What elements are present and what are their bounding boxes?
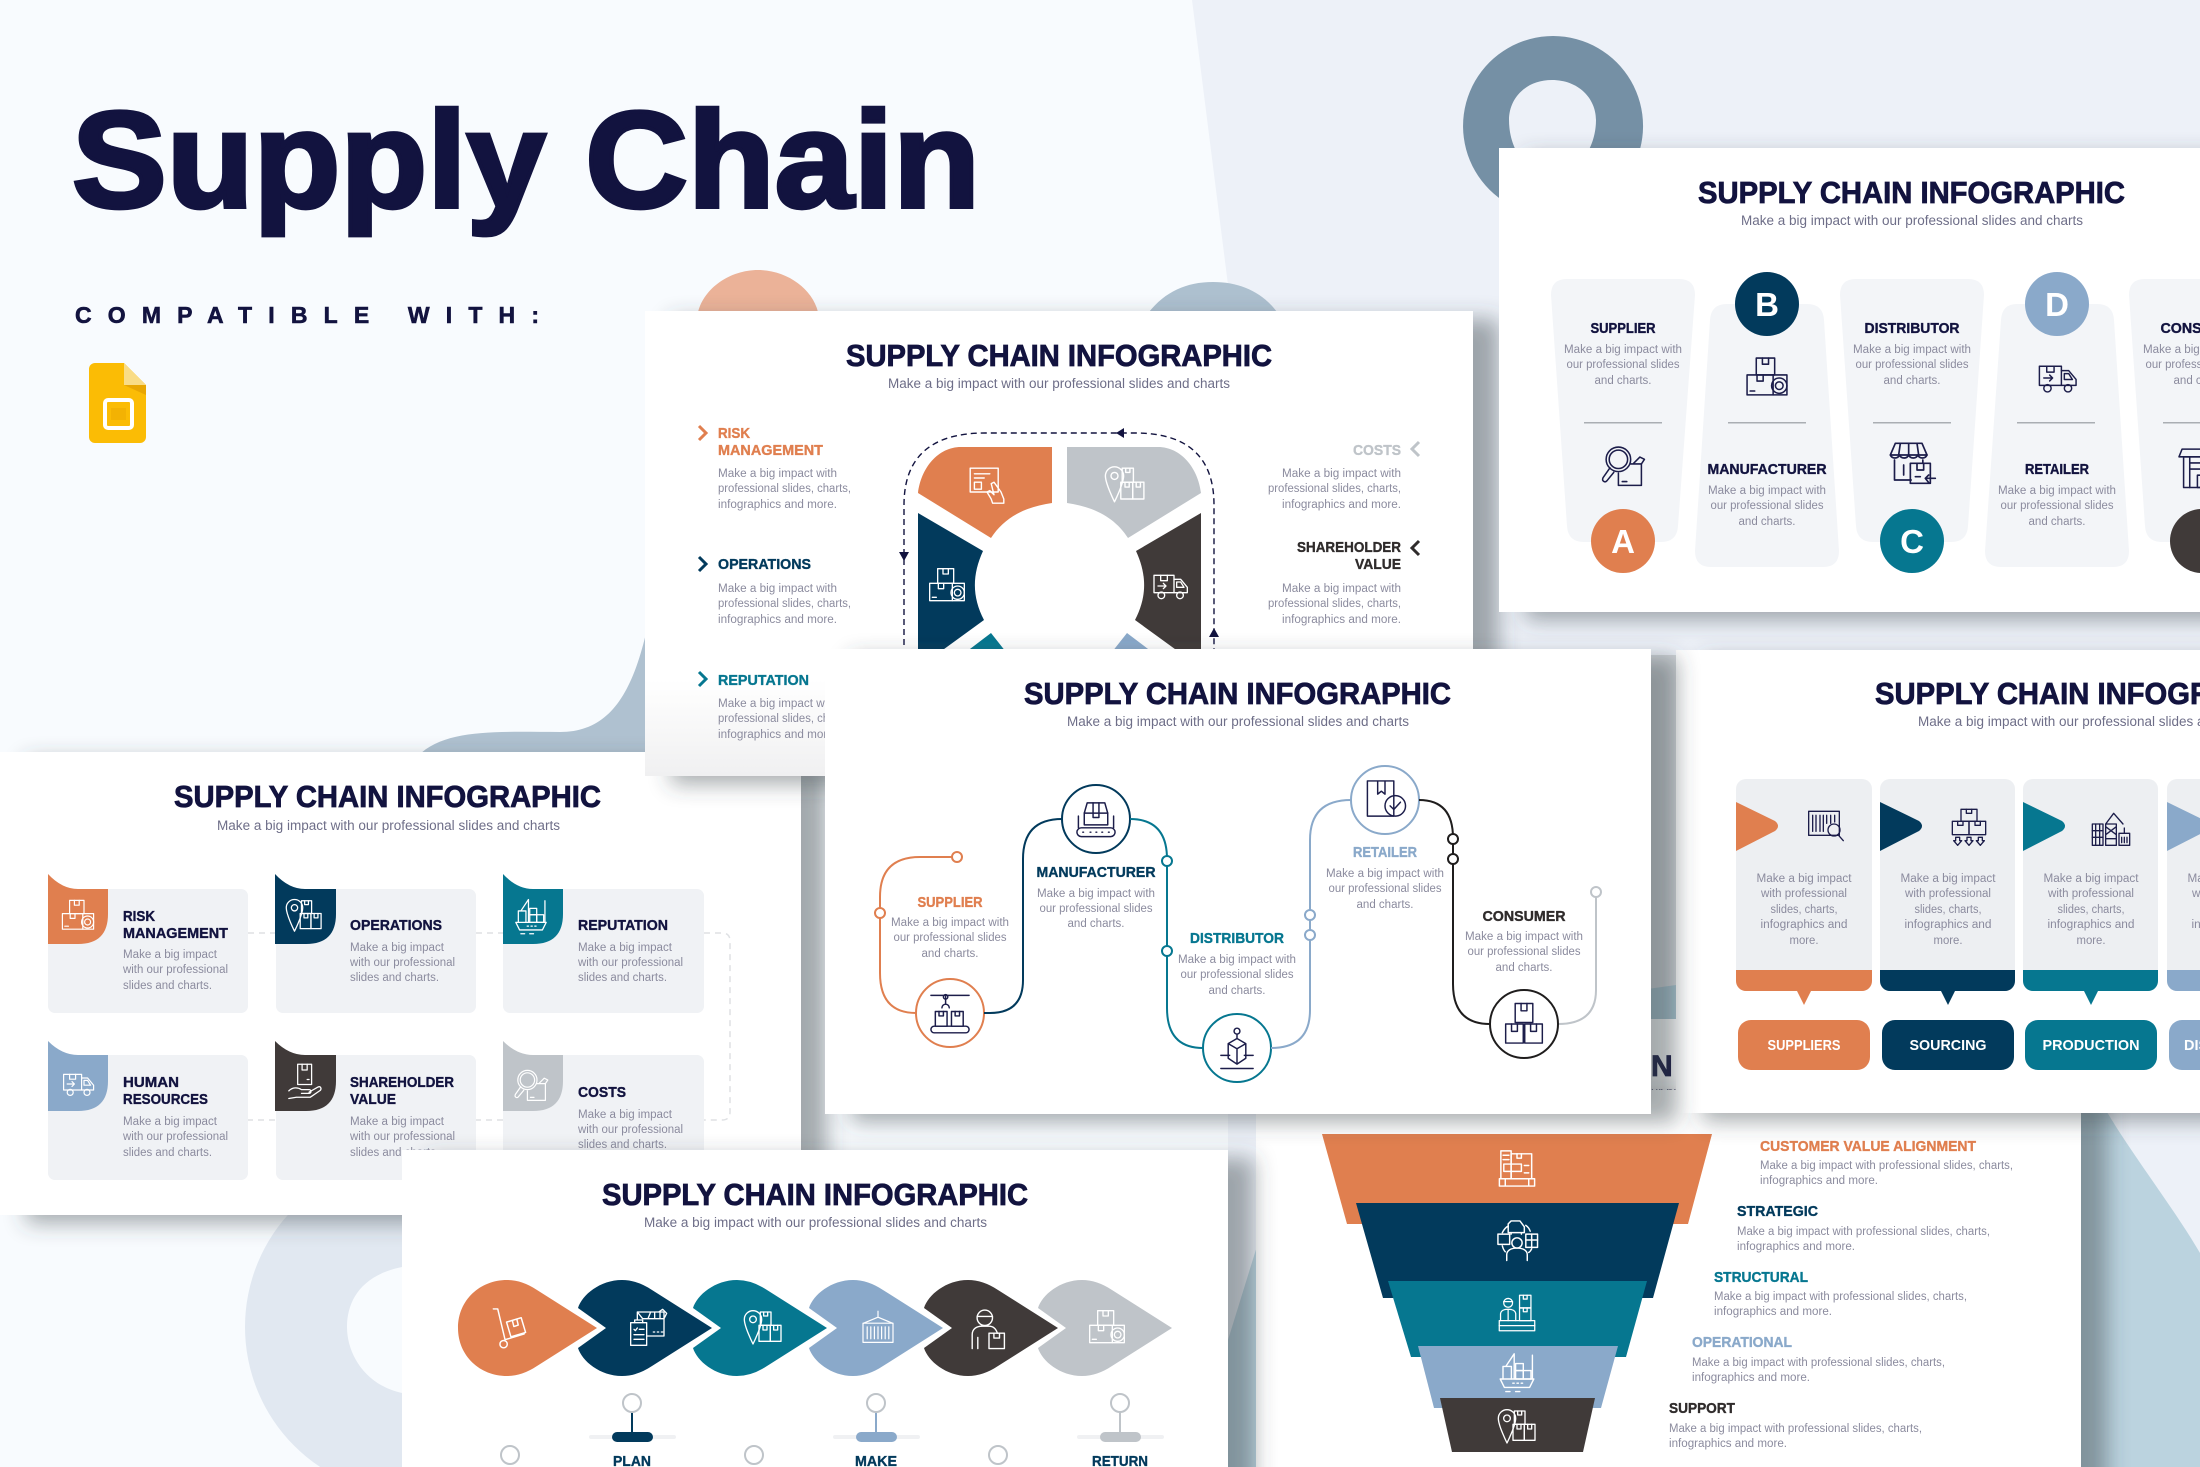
compatible with label: COMPATIBLE WITH: xyxy=(75,302,539,328)
funnel layer: navy xyxy=(1356,1203,1679,1298)
segment: blue xyxy=(1112,633,1152,652)
tile: reputation: slides and charts. xyxy=(578,972,667,984)
subheading: Make a big impact with our professional slides and charts xyxy=(644,1215,987,1230)
tile: human resources: Make a big impact xyxy=(123,1116,218,1128)
card: sourcing xyxy=(1880,779,2015,1070)
arrow: blue xyxy=(809,1280,943,1376)
funnel text: structural: infographics and more. xyxy=(1714,1306,1832,1318)
funnel text: support xyxy=(1669,1401,1922,1450)
left item: operations: OPERATIONS xyxy=(718,557,811,573)
lower marker pins xyxy=(501,1446,1007,1464)
funnel text: customer value alignment: infographics and more. xyxy=(1760,1175,1878,1187)
column: distributor xyxy=(1840,279,1984,573)
card: suppliers: more. xyxy=(1790,935,1818,947)
decorative blob xyxy=(418,615,650,756)
column: retailer: Make a big impact with xyxy=(1998,485,2116,497)
tile: operations: Make a big impact xyxy=(350,942,445,954)
marker: return xyxy=(1077,1394,1164,1467)
step: distributor: our professional slides xyxy=(1180,969,1294,981)
right item: shareholder value xyxy=(1268,540,1419,626)
column: retailer: our professional slides xyxy=(2000,500,2114,512)
tile: shareholder value: Make a big impact xyxy=(350,1116,445,1128)
panel: slide product columns xyxy=(1676,650,2200,1113)
step: distributor: and charts. xyxy=(1208,985,1266,997)
funnel layer: orange xyxy=(1322,1134,1712,1224)
column: supplier xyxy=(1551,279,1695,573)
tile: shareholder value: with our professional xyxy=(349,1131,455,1143)
tile: costs: with our professional xyxy=(577,1124,683,1136)
tile: shareholder value: VALUE xyxy=(350,1092,396,1108)
decorative ring top right xyxy=(1463,36,1643,216)
panel: slide process path xyxy=(825,649,1651,1114)
icon: google slides xyxy=(89,363,146,443)
column: manufacturer: Make a big impact with xyxy=(1708,485,1826,497)
segment: dark xyxy=(1135,513,1201,668)
step: retailer: our professional slides xyxy=(1328,883,1442,895)
tile: human resources xyxy=(48,1041,248,1180)
segment: orange xyxy=(918,447,1052,538)
arrow: teal xyxy=(693,1280,827,1376)
tile: risk management: Make a big impact xyxy=(123,949,218,961)
column: distributor: Make a big impact with xyxy=(1853,344,1971,356)
right item: costs xyxy=(1268,442,1419,511)
step: supplier: and charts. xyxy=(922,948,978,960)
tile: risk management: with our professional xyxy=(122,964,228,976)
card: sourcing: more. xyxy=(1934,935,1962,947)
panel: slide arrow chain xyxy=(402,1150,1228,1467)
right item: shareholder value: VALUE xyxy=(1355,557,1401,573)
card: production: infographics and xyxy=(2048,919,2134,931)
tile: reputation: REPUTATION xyxy=(578,918,668,934)
arrow: orange xyxy=(458,1280,597,1376)
card: suppliers: slides, charts, xyxy=(1770,904,1838,916)
tile: human resources: with our professional xyxy=(122,1131,228,1143)
step: manufacturer: Make a big impact with xyxy=(1037,888,1155,900)
step: consumer xyxy=(1419,800,1601,1058)
funnel layer: dark xyxy=(1440,1398,1595,1452)
step: consumer: our professional slides xyxy=(1468,946,1581,958)
decorative peach dome xyxy=(698,270,818,312)
subheading: Make a big impact with our professional slides and charts xyxy=(888,376,1230,391)
step: consumer: CONSUMER xyxy=(1482,909,1566,925)
card: suppliers: Make a big impact xyxy=(1756,873,1852,885)
left item: reputation xyxy=(699,672,851,741)
step: distributor xyxy=(1130,819,1296,1082)
tile: risk management: RISK xyxy=(123,909,155,925)
heading: SUPPLY CHAIN INFOGRAPHIC xyxy=(1698,175,2125,210)
tile: operations: OPERATIONS xyxy=(350,918,442,934)
column: distributor: and charts. xyxy=(1884,375,1940,387)
tile: costs: COSTS xyxy=(578,1085,626,1101)
column: distributor: our professional slides xyxy=(1856,359,1969,371)
icon: delivery truck xyxy=(1154,575,1187,599)
tile: risk management: MANAGEMENT xyxy=(123,926,228,942)
step: retailer xyxy=(1271,766,1444,1048)
tile: operations xyxy=(275,874,476,1013)
card: production: more. xyxy=(2076,935,2106,947)
right item: costs: professional slides, charts, xyxy=(1268,483,1401,495)
column: manufacturer: our professional slides xyxy=(1710,500,1824,512)
panel: partial slide in gap: ur pr xyxy=(1651,1084,1678,1099)
right item: costs: Make a big impact with xyxy=(1282,468,1401,480)
card: production: Make a big impact xyxy=(2044,873,2139,885)
left item: reputation: professional slides, charts, xyxy=(718,713,851,725)
marker: plan xyxy=(589,1394,676,1467)
column: supplier: our professional slides xyxy=(1566,359,1680,371)
icon: package card xyxy=(970,468,1004,503)
left item: risk management xyxy=(699,426,851,511)
decorative blue dome xyxy=(1149,282,1277,312)
subheading: Make a big impact with our professional slides and charts xyxy=(1741,213,2083,228)
funnel text: structural xyxy=(1714,1270,1967,1318)
tile: shareholder value: slides and charts. xyxy=(350,1147,439,1159)
step: supplier: SUPPLIER xyxy=(918,895,983,911)
funnel text: strategic: Make a big impact with professional slides, charts, xyxy=(1737,1226,1990,1238)
tile: shareholder value: SHAREHOLDER xyxy=(350,1075,454,1091)
left item: operations: infographics and more. xyxy=(718,614,837,626)
left item: operations: professional slides, charts, xyxy=(718,598,851,610)
arrow: navy xyxy=(578,1280,712,1376)
funnel text: customer value alignment: Make a big impact with professional slides, charts, xyxy=(1760,1160,2013,1172)
left item: risk management: infographics and more. xyxy=(718,499,837,511)
step: supplier: our professional slides xyxy=(894,932,1007,944)
funnel layer: teal xyxy=(1388,1281,1647,1357)
left item: operations: Make a big impact with xyxy=(718,583,837,595)
right item: shareholder value: Make a big impact with xyxy=(1282,583,1401,595)
tile: human resources: RESOURCES xyxy=(123,1092,208,1108)
arrow: dark xyxy=(924,1280,1058,1376)
tile: costs xyxy=(503,1041,704,1180)
heading: SUPPLY CHAIN INFOGRAPHIC xyxy=(846,338,1272,373)
step: manufacturer: our professional slides xyxy=(1040,903,1153,915)
column: consumer xyxy=(2129,279,2200,573)
funnel text: structural: Make a big impact with professional slides, charts, xyxy=(1714,1291,1967,1303)
card: sourcing: with professional xyxy=(1904,888,1991,900)
arrow: gray xyxy=(1038,1280,1172,1376)
tile: operations: with our professional xyxy=(349,957,455,969)
funnel text: operational: infographics and more. xyxy=(1692,1372,1810,1384)
panel: partial slide in gap xyxy=(1640,655,1680,1115)
card: suppliers: with professional xyxy=(1760,888,1847,900)
right item: shareholder value: infographics and more. xyxy=(1282,614,1401,626)
card: distribution xyxy=(2167,779,2200,1070)
right item: shareholder value: SHAREHOLDER xyxy=(1297,540,1401,556)
dashed cycle loop xyxy=(899,428,1219,655)
card: sourcing: infographics and xyxy=(1904,919,1992,931)
panel: slide funnel xyxy=(1256,1090,2081,1467)
heading: SUPPLY CHAIN INFOGRAPHIC xyxy=(602,1177,1028,1212)
step: manufacturer: MANUFACTURER xyxy=(1036,865,1156,881)
marker: make xyxy=(833,1394,920,1467)
step: supplier: Make a big impact with xyxy=(891,917,1009,929)
panel: slide columns A to E xyxy=(1499,148,2200,612)
funnel text: support: infographics and more. xyxy=(1669,1438,1787,1450)
left item: reputation: REPUTATION xyxy=(718,673,809,689)
funnel text: structural: STRUCTURAL xyxy=(1714,1270,1808,1286)
step: consumer: and charts. xyxy=(1496,962,1552,974)
panel: slide six tiles xyxy=(0,752,801,1215)
column: supplier: Make a big impact with xyxy=(1564,344,1682,356)
funnel text: strategic: STRATEGIC xyxy=(1737,1204,1819,1220)
column: distributor: C xyxy=(1900,523,1924,560)
tile: costs: Make a big impact xyxy=(578,1109,673,1121)
funnel text: support: Make a big impact with professional slides, charts, xyxy=(1669,1423,1922,1435)
column: manufacturer: and charts. xyxy=(1738,516,1796,528)
left item: risk management: MANAGEMENT xyxy=(718,443,823,459)
left item: reputation: infographics and more. xyxy=(718,729,837,741)
tile: reputation xyxy=(503,874,704,1013)
tile: human resources: HUMAN xyxy=(123,1075,179,1091)
tile: human resources: slides and charts. xyxy=(123,1147,212,1159)
step: retailer: Make a big impact with xyxy=(1326,868,1444,880)
funnel layer: blue xyxy=(1418,1346,1618,1408)
tile: risk management: slides and charts. xyxy=(123,980,212,992)
main title: Supply Chain xyxy=(72,84,980,237)
step: retailer: and charts. xyxy=(1356,899,1414,911)
tile: shareholder value xyxy=(275,1041,476,1180)
step: manufacturer: and charts. xyxy=(1068,918,1124,930)
card: sourcing: slides, charts, xyxy=(1914,904,1982,916)
card: production: slides, charts, xyxy=(2058,904,2124,916)
column: supplier: SUPPLIER xyxy=(1590,321,1656,337)
heading: SUPPLY CHAIN INFOGRAPHIC xyxy=(174,779,601,814)
column: manufacturer xyxy=(1695,272,1839,567)
card: production xyxy=(2023,779,2158,1070)
left item: risk management: RISK xyxy=(718,426,750,442)
card: suppliers xyxy=(1736,779,1872,1070)
step: consumer: Make a big impact with xyxy=(1465,931,1583,943)
icon: location boxes xyxy=(1105,467,1144,502)
funnel text: strategic xyxy=(1737,1204,1990,1253)
right item: costs: COSTS xyxy=(1353,443,1401,459)
panel: partial slide in gap: N xyxy=(1651,1050,1673,1083)
card: sourcing: Make a big impact xyxy=(1900,873,1996,885)
card: production: with professional xyxy=(2047,888,2134,900)
tile: risk management xyxy=(48,874,248,1013)
dashed connectors xyxy=(248,933,730,1120)
column: manufacturer: MANUFACTURER xyxy=(1708,462,1827,478)
column: retailer: D xyxy=(2045,286,2069,323)
step: distributor: DISTRIBUTOR xyxy=(1190,931,1284,947)
funnel text: customer value alignment xyxy=(1760,1139,2013,1187)
column: distributor: DISTRIBUTOR xyxy=(1864,321,1960,337)
tile: costs: slides and charts. xyxy=(578,1139,667,1151)
column: supplier: and charts. xyxy=(1594,375,1652,387)
funnel text: operational: OPERATIONAL xyxy=(1692,1335,1792,1351)
card: suppliers: infographics and xyxy=(1760,919,1848,931)
segment: navy xyxy=(918,513,984,668)
subheading: Make a big impact with our professional slides and charts xyxy=(217,818,560,833)
left item: reputation: Make a big impact with xyxy=(718,698,837,710)
right item: shareholder value: professional slides, charts, xyxy=(1268,598,1401,610)
step: manufacturer xyxy=(984,785,1156,1013)
tile: operations: slides and charts. xyxy=(350,972,439,984)
funnel text: support: SUPPORT xyxy=(1669,1401,1735,1417)
segment: teal xyxy=(966,633,1006,652)
column: retailer xyxy=(1985,272,2129,567)
column: retailer: RETAILER xyxy=(2025,462,2089,478)
right item: costs: infographics and more. xyxy=(1282,499,1401,511)
card: production: PRODUCTION xyxy=(2042,1037,2140,1054)
step: retailer: RETAILER xyxy=(1353,845,1417,861)
left item: risk management: Make a big impact with xyxy=(718,468,837,480)
segment: gray xyxy=(1067,447,1201,538)
left item: risk management: professional slides, charts, xyxy=(718,483,851,495)
step: supplier xyxy=(875,852,1009,1047)
funnel text: operational xyxy=(1692,1335,1945,1384)
icon: boxes xyxy=(930,569,964,601)
tile: reputation: Make a big impact xyxy=(578,942,673,954)
tile: reputation: with our professional xyxy=(577,957,683,969)
funnel text: strategic: infographics and more. xyxy=(1737,1241,1855,1253)
heading: SUPPLY CHAIN INFOGRAPHIC xyxy=(1024,676,1451,711)
left item: operations xyxy=(699,557,851,626)
column: retailer: and charts. xyxy=(2028,516,2086,528)
subheading: Make a big impact with our professional slides and charts xyxy=(1067,714,1409,729)
funnel text: operational: Make a big impact with professional slides, charts, xyxy=(1692,1357,1945,1369)
step: distributor: Make a big impact with xyxy=(1178,954,1296,966)
column: supplier: A xyxy=(1611,523,1635,560)
panel: slide cycle diagram xyxy=(645,311,1473,776)
funnel text: customer value alignment: CUSTOMER VALUE ALIGNMENT xyxy=(1760,1139,1976,1155)
column: manufacturer: B xyxy=(1755,286,1779,323)
card: sourcing: SOURCING xyxy=(1910,1037,1986,1054)
card: suppliers: SUPPLIERS xyxy=(1768,1037,1840,1054)
